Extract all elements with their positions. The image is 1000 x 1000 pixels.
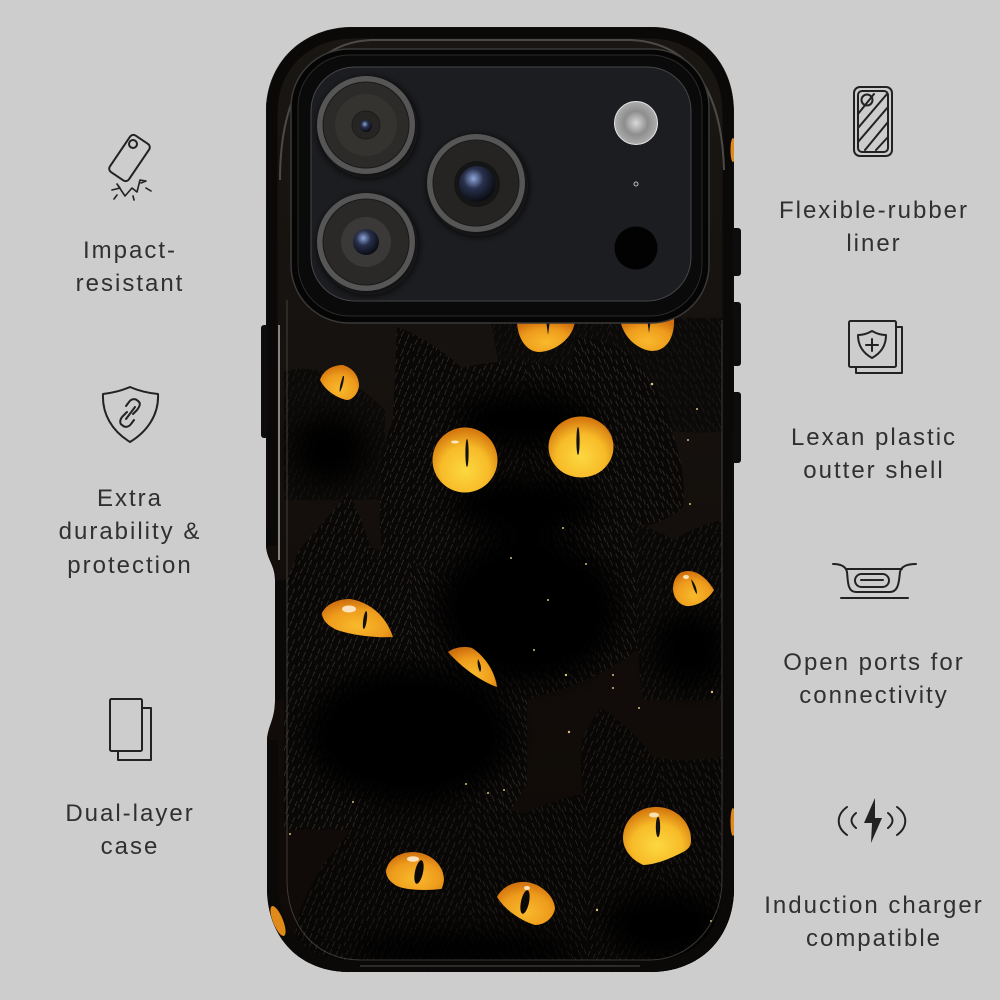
printed artwork [266, 27, 734, 972]
icon: dropped phone [108, 133, 151, 200]
icon: usb-c port [833, 564, 916, 598]
feature: extra durability [59, 387, 201, 579]
eye: main cat right [548, 416, 614, 478]
label: connectivity [799, 682, 949, 709]
orange eye peeks at edge [267, 138, 736, 938]
sensor [614, 226, 658, 270]
eyes [320, 318, 714, 925]
label: Impact- [83, 237, 177, 264]
feature: impact-resistant [76, 133, 184, 297]
icon: shield with link [103, 387, 158, 442]
eye: main cat left [432, 428, 498, 492]
eyes: top cats [517, 318, 674, 352]
label: compatible [806, 925, 942, 952]
eye: bottom cat right [497, 882, 555, 925]
label: Open ports for [783, 649, 965, 676]
feature: dual-layer [65, 699, 195, 860]
label: Lexan plastic [791, 424, 957, 451]
eye: bottom cat left [386, 852, 444, 890]
eye: mid cat right [448, 647, 497, 687]
eye: right small [673, 571, 714, 606]
camera island [291, 49, 709, 323]
eye: mid cat left [322, 599, 393, 637]
label: Flexible-rubber [779, 197, 969, 224]
camera plate [311, 67, 691, 301]
label: outter shell [803, 457, 945, 484]
feature: flexible-rubber liner [779, 87, 969, 257]
eye: bottom cat far right [623, 807, 691, 865]
icon: striped phone liner [854, 87, 892, 156]
phone case [261, 27, 741, 972]
label: Extra [97, 485, 163, 512]
microphone [634, 182, 638, 186]
case rim highlights [272, 33, 728, 966]
shaded fur areas [292, 390, 728, 970]
artwork background [266, 27, 734, 972]
lens: top left [317, 76, 418, 178]
icon: wireless charging bolt [839, 798, 905, 843]
island frame [291, 49, 709, 323]
side buttons [261, 228, 741, 463]
case body [266, 27, 734, 972]
label: protection [67, 552, 193, 579]
label: Dual-layer [65, 800, 195, 827]
label: liner [846, 230, 902, 257]
flash [614, 102, 658, 144]
lens: centre [427, 134, 528, 236]
label: resistant [76, 270, 184, 297]
main cat nose [518, 474, 536, 482]
eye: left small [320, 365, 359, 400]
icon: shell with shield [849, 321, 902, 373]
feature: lexan plastic shell [791, 321, 957, 484]
icon: two layers [110, 699, 151, 760]
feature: induction charger [764, 798, 984, 952]
stars [272, 383, 713, 954]
cats [284, 318, 734, 972]
label: durability & [59, 518, 201, 545]
label: Induction charger [764, 892, 984, 919]
feature: open ports [783, 564, 965, 709]
lens: bottom left [317, 193, 418, 295]
label: case [101, 833, 159, 860]
